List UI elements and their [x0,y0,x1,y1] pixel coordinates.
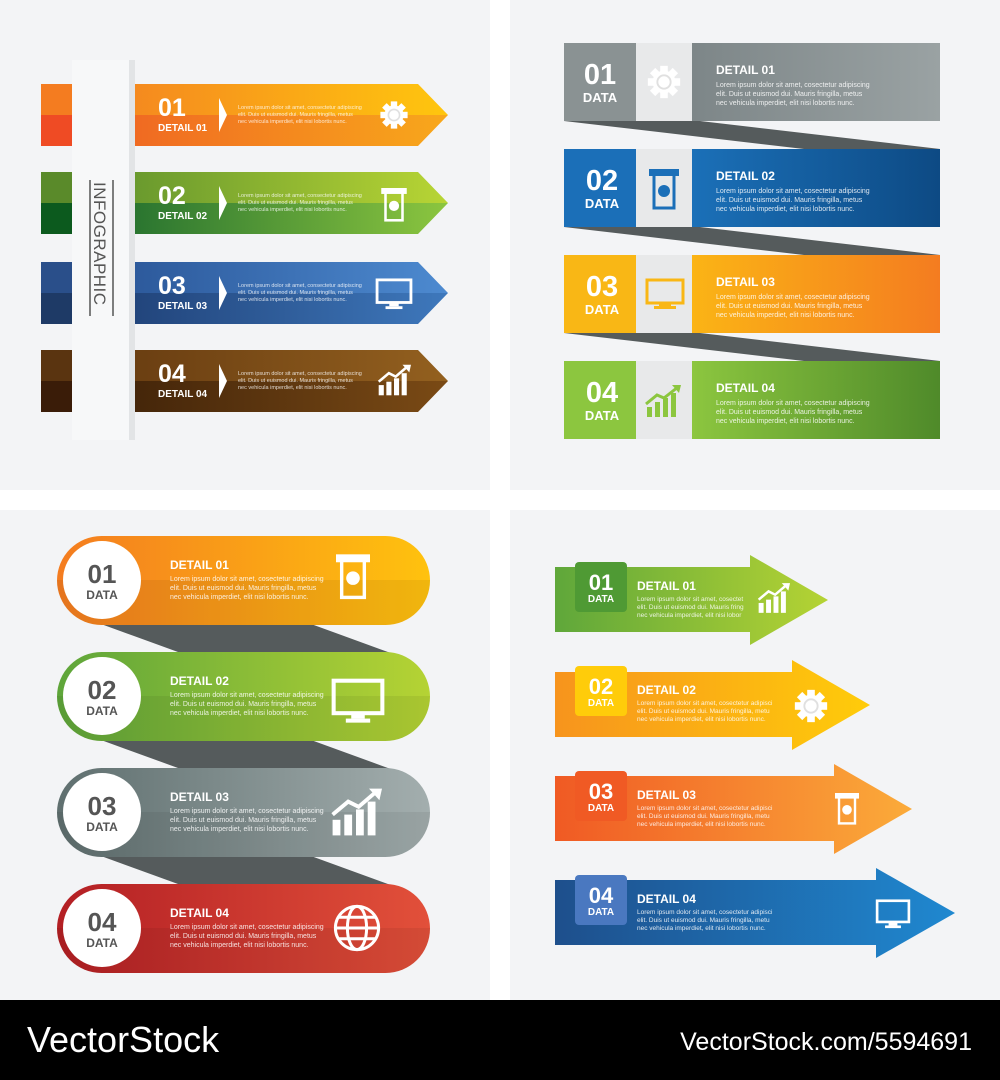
bar 04: 04 [586,377,618,409]
arrow 01: Lorem ipsum dolor sit amet, consectetur adipiscing [238,105,362,111]
pill 03: elit. Duis ut euismod dui. Mauris fringilla, metus [170,817,317,824]
footer bar [0,1000,1000,1080]
pill 01: Lorem ipsum dolor sit amet, cosectetur adipiscing [170,576,324,583]
pill 01: DETAIL 01 [170,558,229,572]
arrow 03: nec vehicula imperdiet, elit nisi lobortis nunc. [238,297,347,303]
panel: bottom-right arrows [555,555,955,958]
arrow 02: nec vehicula imperdiet, elit nisi lobortis nunc. [637,716,766,723]
arrow 04 [555,868,955,958]
arrow 04: 04 [158,360,186,388]
bar 04: DETAIL 04 [716,381,775,395]
arrow 04: 04 [589,883,614,908]
arrow 03 [555,764,912,854]
pill 02: DATA [86,704,118,718]
arrow 01: nec vehicula imperdiet, elit nisi lobor [637,612,742,619]
arrow 03: Lorem ipsum dolor sit amet, cosectetur adipisci [637,805,772,812]
pill 03: DETAIL 03 [170,790,229,804]
arrow 01: DETAIL 01 [637,579,696,593]
bar 04: Lorem ipsum dolor sit amet, cosectetur adipiscing [716,400,870,407]
arrow 04: elit. Duis ut euismod dui. Mauris fringilla, metu [637,917,770,924]
arrow 03 [135,262,448,324]
arrow 03: DETAIL 03 [637,788,696,802]
pill 02: elit. Duis ut euismod dui. Mauris fringilla, metus [170,701,317,708]
bar 02: DETAIL 02 [716,169,775,183]
bar 01: Lorem ipsum dolor sit amet, cosectetur adipiscing [716,82,870,89]
arrow 04: nec vehicula imperdiet, elit nisi lobortis nunc. [637,925,766,932]
bar 03: Lorem ipsum dolor sit amet, cosectetur adipiscing [716,294,870,301]
pill 04: DATA [86,936,118,950]
pill 03: nec vehicula imperdiet, elit nisi lobortis nunc. [170,826,309,833]
footer bar: VectorStock.com/5594691 [680,1028,972,1056]
vertical INFOGRAPHIC label: INFOGRAPHIC [90,182,109,306]
bar 02: elit. Duis ut euismod dui. Mauris fringilla, metus [716,197,863,204]
pill 02 [57,652,430,741]
bar 01: nec vehicula imperdiet, elit nisi lobortis nunc. [716,100,855,107]
arrow 03: Lorem ipsum dolor sit amet, consectetur adipiscing [238,283,362,289]
bar 03: nec vehicula imperdiet, elit nisi lobortis nunc. [716,312,855,319]
arrow 04: elit. Duis ut euismod dui. Mauris fringilla, metus [238,378,353,384]
pill 02: 02 [88,675,116,705]
pill 03: Lorem ipsum dolor sit amet, cosectetur adipiscing [170,808,324,815]
bar 02 [564,149,940,227]
pill 02: nec vehicula imperdiet, elit nisi lobortis nunc. [170,710,309,717]
arrow 03: 03 [158,272,186,300]
bar 03: DETAIL 03 [716,275,775,289]
bar 04: nec vehicula imperdiet, elit nisi lobortis nunc. [716,418,855,425]
arrow 03: elit. Duis ut euismod dui. Mauris fringilla, metus [238,290,353,296]
pill 03: DATA [86,820,118,834]
arrow 01 [555,555,828,645]
pill 04: DETAIL 04 [170,906,229,920]
footer bar: VectorStock [27,1019,220,1060]
arrow 04: DETAIL 04 [637,892,696,906]
pill 01: 01 [88,559,116,589]
bar 01: DETAIL 01 [716,63,775,77]
arrow 04: nec vehicula imperdiet, elit nisi lobortis nunc. [238,385,347,391]
bar 01: DATA [583,90,618,105]
pill 03: 03 [88,791,116,821]
arrow 01: DATA [588,594,614,605]
pill 04: nec vehicula imperdiet, elit nisi lobortis nunc. [170,942,309,949]
arrow 03: DETAIL 03 [158,301,208,312]
arrow 02 [135,172,448,234]
pill 04: elit. Duis ut euismod dui. Mauris fringilla, metus [170,933,317,940]
side color strips [41,60,135,440]
pill 01: DATA [86,588,118,602]
bar 01: elit. Duis ut euismod dui. Mauris fringilla, metus [716,91,863,98]
bar 02: nec vehicula imperdiet, elit nisi lobortis nunc. [716,206,855,213]
arrow 02: nec vehicula imperdiet, elit nisi lobortis nunc. [238,207,347,213]
bar 02: Lorem ipsum dolor sit amet, cosectetur adipiscing [716,188,870,195]
pill 01: nec vehicula imperdiet, elit nisi lobortis nunc. [170,594,309,601]
arrow 02: DETAIL 02 [158,211,208,222]
bar 03: DATA [585,302,620,317]
connector shadows [564,121,940,361]
bar 03 [564,255,940,333]
arrow 03: nec vehicula imperdiet, elit nisi lobortis nunc. [637,821,766,828]
bar 01: 01 [584,59,616,91]
pill 04 [57,884,430,973]
pill 04: Lorem ipsum dolor sit amet, cosectetur adipiscing [170,924,324,931]
arrow 02: DETAIL 02 [637,683,696,697]
arrow 04: Lorem ipsum dolor sit amet, consectetur adipiscing [238,371,362,377]
panel: bottom-left pills [57,536,430,973]
arrow 02: Lorem ipsum dolor sit amet, cosectetur adipisci [637,700,772,707]
arrow 02: elit. Duis ut euismod dui. Mauris fringilla, metus [238,200,353,206]
bar 04 [564,361,940,439]
arrow 01: 01 [158,94,186,122]
arrow 02: Lorem ipsum dolor sit amet, consectetur adipiscing [238,193,362,199]
arrow 01: elit. Duis ut euismod dui. Mauris fringilla, metus [238,112,353,118]
arrow 01: nec vehicula imperdiet, elit nisi lobortis nunc. [238,119,347,125]
bar 02: DATA [585,196,620,211]
bar 04: elit. Duis ut euismod dui. Mauris fringilla, metus [716,409,863,416]
bar 01 [564,43,940,121]
bar 03: 03 [586,271,618,303]
bar 04: DATA [585,408,620,423]
arrow 02: 02 [158,182,186,210]
arrow 01: elit. Duis ut euismod dui. Mauris fring [637,604,744,611]
pill 02: Lorem ipsum dolor sit amet, cosectetur adipiscing [170,692,324,699]
pill 03 [57,768,430,857]
pill connector shadows [90,620,410,892]
arrow 03: elit. Duis ut euismod dui. Mauris fringilla, metu [637,813,770,820]
arrow 04 [135,350,448,412]
arrow 04: DETAIL 04 [158,389,208,400]
arrow 03: DATA [588,803,614,814]
bar 03: elit. Duis ut euismod dui. Mauris fringilla, metus [716,303,863,310]
arrow 02: 02 [589,674,613,699]
arrow 03: 03 [589,779,613,804]
arrow 02: DATA [588,698,614,709]
arrow 01: Lorem ipsum dolor sit amet, cosectet [637,596,743,603]
arrow 04: Lorem ipsum dolor sit amet, cosectetur adipisci [637,909,772,916]
pill 01 [57,536,430,625]
arrow 02: elit. Duis ut euismod dui. Mauris fringilla, metu [637,708,770,715]
pill 01: elit. Duis ut euismod dui. Mauris fringilla, metus [170,585,317,592]
arrow 04: DATA [588,907,614,918]
arrow 01: 01 [589,570,613,595]
pill 04: 04 [88,907,117,937]
arrow 02 [555,660,870,750]
bar 02: 02 [586,165,618,197]
panel: top-right stacked bars [564,43,940,439]
panel: top-left arrows [41,60,448,440]
arrow 01: DETAIL 01 [158,123,208,134]
pill 02: DETAIL 02 [170,674,229,688]
arrow 01 [135,84,448,146]
